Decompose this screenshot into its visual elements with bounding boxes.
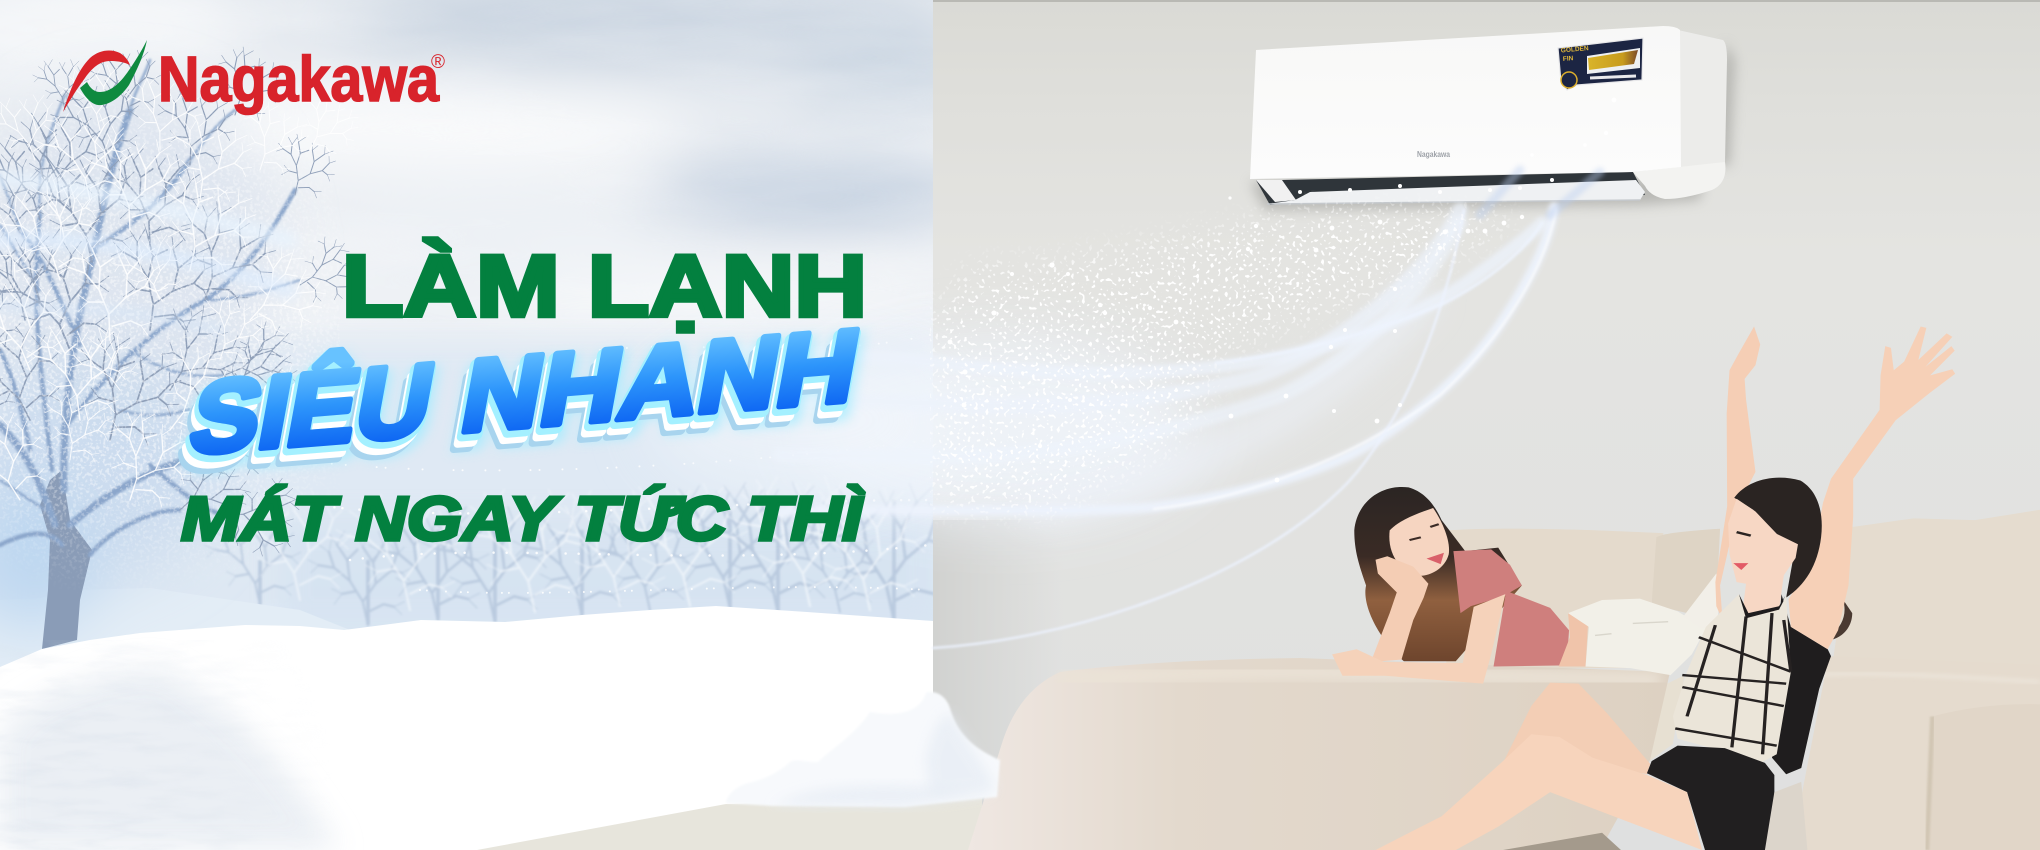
ice face (182, 306, 868, 476)
white shorts (1568, 599, 1706, 675)
sticker title: GOLDEN (1561, 45, 1589, 54)
eyes and lips (1410, 524, 1439, 540)
panel: winter scene (0, 0, 990, 850)
raised right arm (1789, 327, 1955, 649)
rear side panel (1678, 30, 1727, 167)
arm with hand on cheek (1371, 556, 1428, 662)
distant snowy haze (249, 344, 699, 478)
wide glow (800, 340, 1200, 520)
brand name on unit: Nagakawa (1417, 150, 1450, 159)
wall (933, 0, 2040, 850)
band D (780, 223, 1460, 457)
twigs (0, 38, 363, 561)
white frosted twigs (0, 65, 336, 508)
frost specks (0, 92, 340, 572)
air conditioner (1250, 26, 1735, 210)
black collar (1739, 594, 1785, 618)
hair (1734, 478, 1822, 598)
rug (1503, 833, 1621, 850)
face and neck (1728, 499, 1798, 620)
thin line (933, 210, 1464, 648)
supporting arm (1332, 594, 1505, 684)
cyan rim: NHANH (452, 311, 867, 458)
extrusion white: SIÊU (176, 352, 437, 488)
falling snow (280, 335, 930, 593)
front leg (1376, 734, 1702, 850)
sky gradient (0, 0, 933, 630)
glow: SIÊU (180, 352, 441, 487)
floor (477, 798, 982, 850)
woman lying (1332, 487, 1720, 684)
waist (1559, 613, 1588, 666)
sofa back (1446, 529, 1663, 668)
large particles (948, 98, 1616, 482)
snow pile (726, 692, 1000, 807)
golden fin sticker (1558, 38, 1643, 90)
glow: NHANH (451, 318, 866, 465)
top black back panel (1772, 594, 1831, 774)
heading: SIÊU NHANH (172, 306, 868, 493)
blouse (1673, 594, 1791, 762)
extrusion white (176, 318, 862, 488)
glow (180, 318, 866, 487)
front panel (1250, 26, 1681, 179)
rear knee leg (1503, 683, 1650, 774)
snow drift shading (0, 667, 340, 850)
panel: living room (933, 0, 2040, 850)
golden fin sticker: FIN (1563, 55, 1574, 63)
extrusion white: NHANH (447, 318, 862, 466)
cold air particles (930, 191, 1504, 510)
eye and lips (1737, 532, 1751, 536)
lower rounded body (1633, 162, 1725, 199)
black shorts (1647, 746, 1774, 850)
cyan rim: SIÊU (180, 345, 441, 480)
sticker badge (1561, 72, 1577, 88)
heading: LÀM LẠNH: LÀM LẠNH (342, 238, 867, 335)
band A (720, 223, 1542, 373)
logo wordmark: Nagakawa (158, 43, 439, 115)
ice face: SIÊU (182, 341, 443, 476)
sofa (1446, 510, 2040, 850)
band B (760, 210, 1460, 406)
ice face: NHANH (453, 306, 868, 454)
flap (1267, 180, 1645, 204)
icon: frosted tree (0, 38, 368, 649)
registered mark: ® (431, 52, 445, 73)
sticker gold fin (1587, 48, 1640, 74)
band C (780, 207, 1554, 512)
shirt (1453, 549, 1569, 666)
heading: MÁT NGAY TỨC THÌ: MÁT NGAY TỨC THÌ (181, 485, 865, 554)
louver vent (1256, 172, 1645, 205)
cyan rim (180, 311, 867, 480)
wind streaks on tree (0, 178, 290, 330)
raised leg (1683, 573, 1720, 629)
snow ground (0, 606, 933, 850)
hair (1354, 487, 1522, 661)
blouse grid (1675, 613, 1791, 754)
boughs (0, 60, 300, 555)
sofa left seat (968, 658, 1670, 850)
left arm raised (1715, 327, 1760, 620)
logo (63, 40, 445, 115)
extrusion shadow: SIÊU (172, 358, 433, 493)
sofa seats (1791, 656, 2040, 850)
logo mark (63, 40, 147, 112)
trunk (40, 470, 92, 649)
cold air stream (650, 170, 1600, 648)
snow hills behind (0, 604, 348, 667)
cloud texture (550, 26, 788, 52)
extrusion shadow: NHANH (443, 323, 858, 471)
hair at back (1829, 599, 1852, 640)
face (1389, 508, 1449, 576)
extrusion shadow (172, 323, 858, 493)
distant frost (235, 492, 922, 612)
frost on tree canopy glow (0, 90, 275, 630)
woman with raised arms (1376, 327, 1955, 850)
grey clouds (0, 0, 933, 244)
cushion (1765, 782, 1807, 850)
shadow (1250, 42, 1735, 210)
distant trees (205, 482, 959, 625)
